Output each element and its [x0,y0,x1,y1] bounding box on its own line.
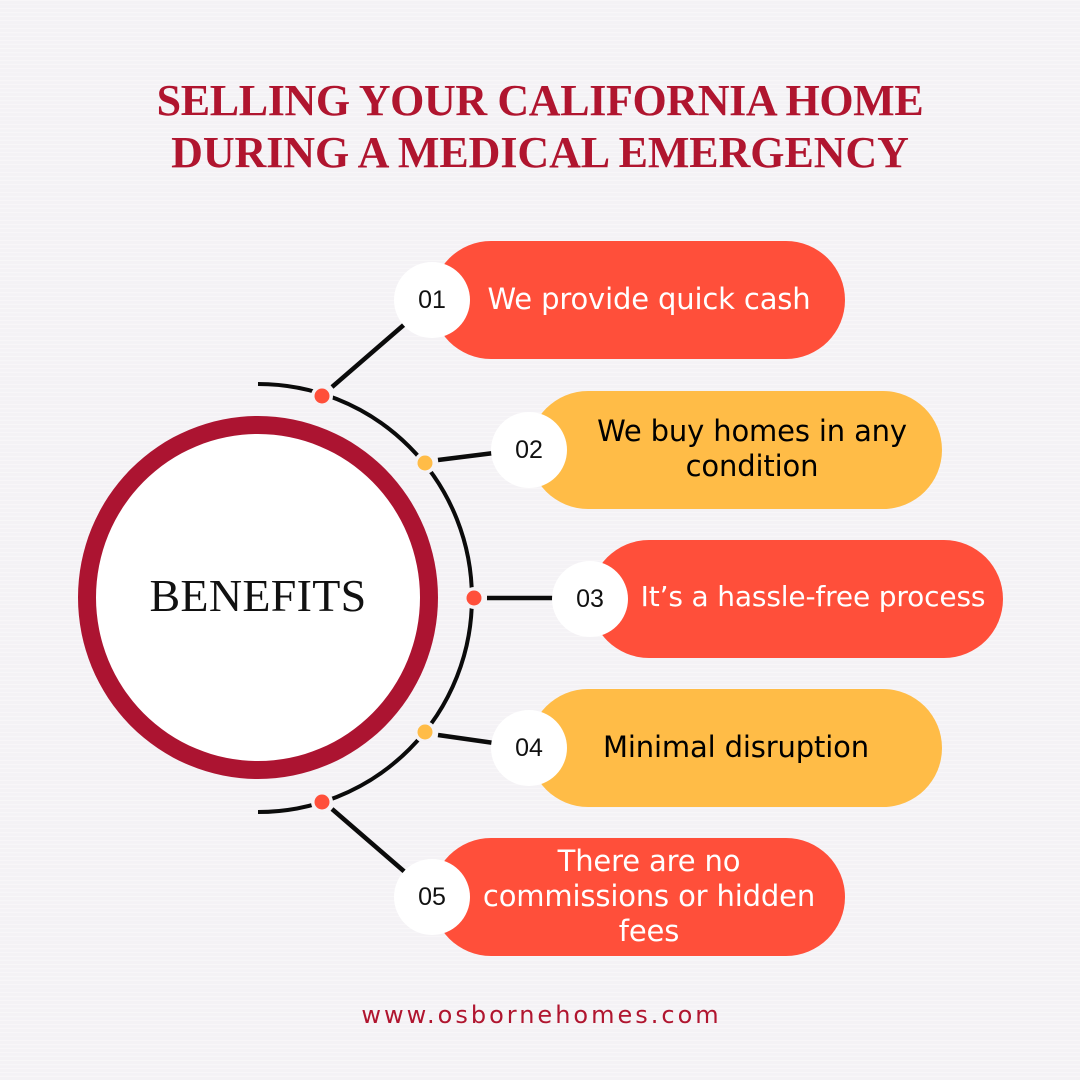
item 04 [491,689,942,807]
item 03: 03 [576,585,604,613]
item 02: condition [686,449,818,483]
central circle: benefits [78,416,438,779]
title [157,76,923,177]
item 05: fees [619,914,679,948]
title: DURING A MEDICAL EMERGENCY [171,128,909,177]
item 01: 01 [418,286,446,314]
item 04: 04 [515,734,543,762]
item 03 [552,540,1003,658]
item 05: commissions or hidden [483,879,815,913]
website: www.osbornehomes.com [361,1001,722,1029]
item 02 [491,391,942,509]
item 01: We provide quick cash [487,282,810,316]
item 02: We buy homes in any [597,414,907,448]
item 02: 02 [515,436,543,464]
item 05: 05 [418,883,446,911]
central circle: benefits: BENEFITS [149,570,367,621]
item 03: It’s a hassle-free process [641,580,985,613]
item 05 [394,838,845,956]
item 05: There are no [558,844,740,878]
item 04: Minimal disruption [603,730,869,764]
title: SELLING YOUR CALIFORNIA HOME [157,76,923,125]
item 01 [394,241,845,359]
